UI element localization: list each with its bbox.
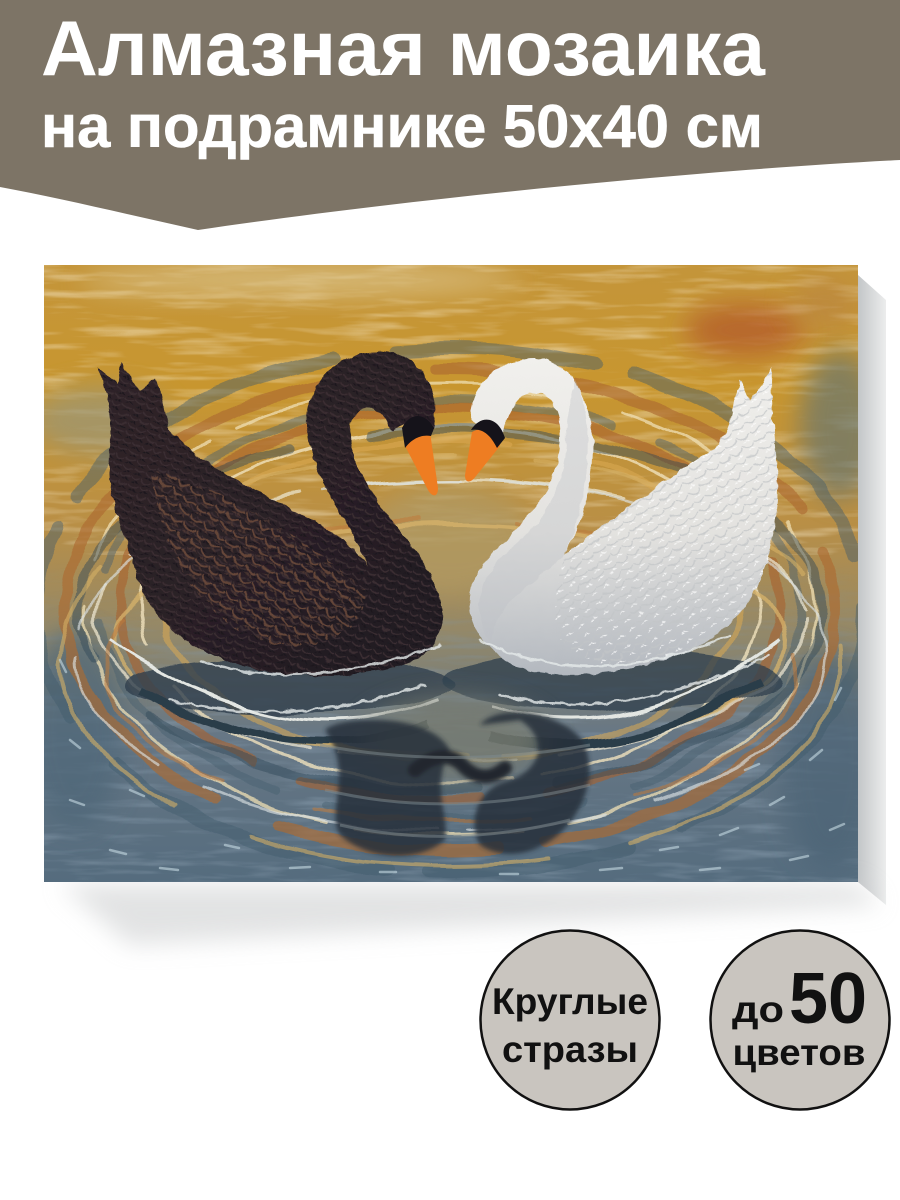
painting: water sparkles [60, 660, 844, 874]
badge: up to 50 colours: до [732, 989, 784, 1030]
badge: round rhinestones [480, 930, 660, 1110]
painting: swan reflection [320, 698, 590, 856]
badge: up to 50 colours: 50 [789, 959, 867, 1039]
subtitle: на подрамнике 50х40 см [41, 93, 763, 160]
black swan face and beak [405, 432, 438, 495]
white swan face and beak [465, 429, 500, 482]
painting: dark water around swans [110, 640, 780, 745]
painting: ripples [35, 348, 865, 872]
painting: streak texture [44, 265, 858, 882]
painting: background colour patches [25, 264, 880, 870]
badge: round rhinestones: Круглые [492, 981, 648, 1022]
painting: water line foam [170, 635, 770, 712]
painting: white swan [465, 358, 778, 675]
painting: black swan [97, 352, 442, 676]
canvas: swan painting [25, 264, 880, 882]
badge: round rhinestones: стразы [502, 1029, 638, 1070]
header banner [0, 0, 900, 230]
title: Алмазная мозаика [41, 4, 766, 92]
badge: up to 50 colours [710, 930, 890, 1110]
canvas shadow [60, 275, 886, 945]
badge: up to 50 colours: цветов [732, 1032, 866, 1073]
